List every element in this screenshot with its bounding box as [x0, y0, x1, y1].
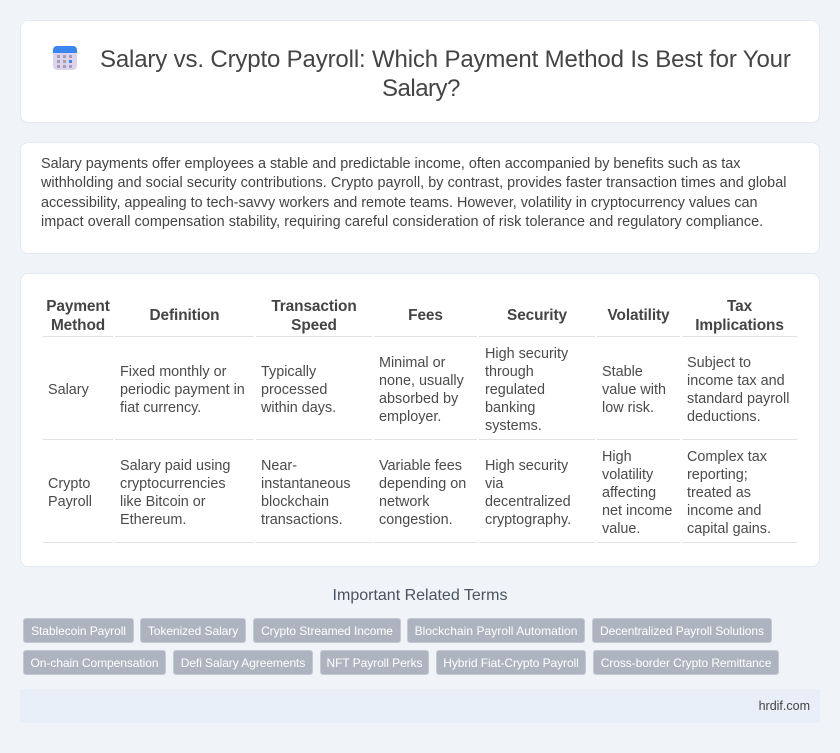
footer text: hrdif.com: [759, 699, 810, 713]
icon: calendar: [53, 46, 77, 70]
tag: Cross-border Crypto Remittance: [601, 656, 771, 670]
table row: Crypto Payroll: transactions.: [261, 512, 343, 528]
title: Salary?: [382, 75, 460, 102]
text block: introduction: impact overall compensation stability, requiring careful consideration of risk tolerance and regulatory compliance.: [41, 214, 763, 230]
title: [100, 46, 791, 102]
table row: Crypto Payroll: capital gains.: [687, 521, 771, 537]
table row: Crypto Payroll: High security: [485, 458, 568, 474]
table header: Implications: [695, 317, 784, 334]
table row: Crypto Payroll: decentralized: [485, 494, 571, 510]
table row: Salary: systems.: [485, 418, 542, 434]
table row: Salary: Typically: [261, 364, 316, 380]
table row: Crypto Payroll: treated as: [687, 485, 751, 501]
table row: Crypto Payroll: High: [602, 449, 632, 465]
tag: [320, 650, 429, 675]
footer bar: [20, 689, 820, 723]
tag: [436, 650, 586, 675]
table header: Payment: [46, 298, 110, 315]
table row: Crypto Payroll: blockchain: [261, 494, 329, 510]
tag: Stablecoin Payroll: [31, 624, 126, 638]
table header: Method: [51, 317, 105, 334]
tag: Defi Salary Agreements: [181, 656, 305, 670]
table row: Salary: fiat currency.: [120, 400, 201, 416]
tag: Decentralized Payroll Solutions: [600, 624, 764, 638]
title: Salary vs. Crypto Payroll: Which Payment Method Is Best for Your: [100, 46, 791, 73]
table row: Salary: [43, 346, 797, 440]
table row: Crypto Payroll: Ethereum.: [120, 512, 186, 528]
heading: important related terms: Important Related Terms: [333, 587, 507, 604]
tag: [23, 618, 134, 643]
table row: Salary: low risk.: [602, 400, 654, 416]
table row: Crypto Payroll: [43, 449, 797, 543]
table row: Salary: through: [485, 364, 534, 380]
table header: Fees: [408, 307, 443, 324]
table row: Crypto Payroll: Crypto: [48, 476, 90, 492]
table row: Crypto Payroll: Payroll: [48, 494, 92, 510]
table row: Crypto Payroll: volatility: [602, 467, 653, 483]
table row: Crypto Payroll: cryptography.: [485, 512, 571, 528]
table row: Crypto Payroll: affecting: [602, 485, 656, 501]
text block: introduction: withholding and social security contributions. Crypto payroll, by contrast, provides faster transaction times and global: [41, 175, 786, 191]
table row: Crypto Payroll: depending on: [379, 476, 466, 492]
text block: introduction: accessibility, appealing to tech-savvy workers and remote teams. However, volatility in cryptocurrency values can: [41, 195, 758, 211]
tag: Crypto Streamed Income: [261, 624, 393, 638]
table row: Salary: periodic payment in: [120, 382, 245, 398]
table row: Salary: processed: [261, 382, 327, 398]
table row: Crypto Payroll: Salary paid using: [120, 458, 230, 474]
tag: [173, 650, 313, 675]
table row: Crypto Payroll: instantaneous: [261, 476, 351, 492]
tag: [140, 618, 246, 643]
table row: Salary: Subject to: [687, 355, 751, 371]
table header: Volatility: [608, 307, 670, 324]
table header: Definition: [150, 307, 219, 324]
table row: Salary: employer.: [379, 409, 441, 425]
table row: Crypto Payroll: cryptocurrencies: [120, 476, 226, 492]
table row: Crypto Payroll: income and: [687, 503, 761, 519]
table row: Salary: Salary: [48, 382, 89, 398]
table row: Salary: banking: [485, 400, 535, 416]
table row: Salary: income tax and: [687, 373, 785, 389]
table row: Salary: regulated: [485, 382, 545, 398]
table row: Salary: Stable: [602, 364, 643, 380]
tag: [592, 618, 772, 643]
tag: [23, 650, 166, 675]
table row: Crypto Payroll: value.: [602, 521, 640, 537]
text block: introduction: Salary payments offer employees a stable and predictable income, often accompanied by benefits such as tax: [41, 156, 740, 172]
tag: Tokenized Salary: [148, 624, 238, 638]
table row: Salary: High security: [485, 346, 568, 362]
table row: Crypto Payroll: reporting;: [687, 467, 748, 483]
table row: Crypto Payroll: network: [379, 494, 429, 510]
table header: [43, 298, 797, 337]
table header: Security: [507, 307, 567, 324]
table header: Tax: [727, 298, 752, 315]
tag: [407, 618, 585, 643]
table row: Crypto Payroll: congestion.: [379, 512, 453, 528]
tag: [593, 650, 779, 675]
table header: Speed: [291, 317, 337, 334]
panel: introduction: [20, 142, 820, 254]
table header: Transaction: [271, 298, 357, 315]
panel: comparison table: [20, 273, 820, 567]
panel: title card: [20, 20, 820, 123]
table row: Salary: value with: [602, 382, 666, 398]
table row: Salary: absorbed by: [379, 391, 458, 407]
tag: Blockchain Payroll Automation: [415, 624, 577, 638]
table row: Crypto Payroll: via: [485, 476, 503, 492]
table row: Salary: within days.: [261, 400, 336, 416]
table row: Salary: none, usually: [379, 373, 464, 389]
table row: Crypto Payroll: Variable fees: [379, 458, 462, 474]
tag: Hybrid Fiat-Crypto Payroll: [443, 656, 579, 670]
table row: Salary: deductions.: [687, 409, 761, 425]
table row: Salary: Fixed monthly or: [120, 364, 226, 380]
table row: Salary: Minimal or: [379, 355, 445, 371]
tag: On-chain Compensation: [31, 656, 158, 670]
tag: [253, 618, 401, 643]
text block: introduction: [41, 156, 786, 230]
table row: Crypto Payroll: net income: [602, 503, 672, 519]
table row: Crypto Payroll: Near-: [261, 458, 297, 474]
table row: Crypto Payroll: like Bitcoin or: [120, 494, 206, 510]
table row: Salary: standard payroll: [687, 391, 789, 407]
tag: NFT Payroll Perks: [327, 656, 422, 670]
tag list: [23, 618, 779, 675]
table row: Crypto Payroll: Complex tax: [687, 449, 767, 465]
